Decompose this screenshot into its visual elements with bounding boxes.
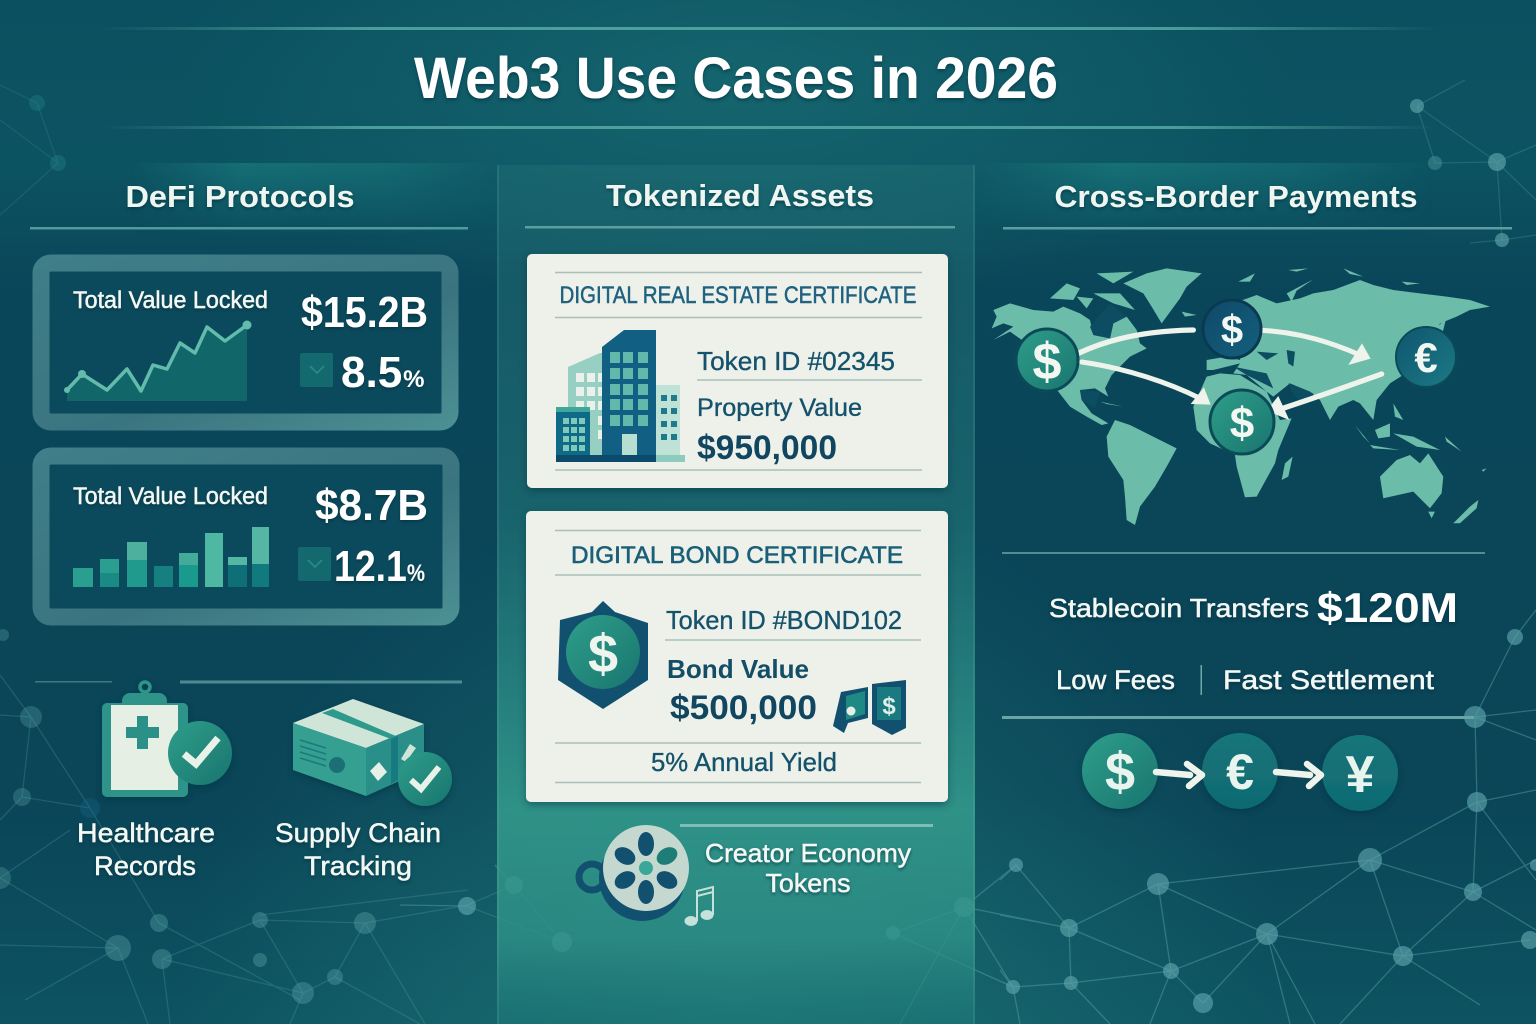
stablecoin transfers: [1049, 584, 1458, 631]
currency conversion flow: [1082, 733, 1398, 811]
card: digital bond certificate: Token ID #BOND102: [666, 605, 902, 635]
arrow: [1156, 764, 1202, 786]
panel: total value locked line chart: Total Value Locked: [73, 287, 268, 314]
panel: total value locked line chart: $15.2B: [301, 288, 428, 337]
panel: total value locked bar chart: [41, 456, 451, 617]
map coins: [1016, 300, 1456, 454]
label: Supply Chain Tracking: Supply Chain: [275, 818, 441, 848]
coin: dollar lower: [1210, 390, 1274, 454]
icon: check badge: [300, 353, 333, 387]
title: [100, 46, 1440, 129]
label: Healthcare Records: Records: [94, 851, 196, 881]
panel: total value locked bar chart: 12.1%: [334, 542, 425, 591]
heading: Cross-Border Payments: Cross-Border Payments: [1054, 179, 1418, 214]
stablecoin transfers: $120M: [1317, 584, 1458, 631]
heading: Tokenized Assets: Tokenized Assets: [606, 178, 874, 213]
coin: dollar: $: [1105, 742, 1135, 802]
bar chart: [73, 527, 269, 587]
column: Cross-Border Payments: [992, 179, 1512, 811]
creator economy tokens: [579, 824, 933, 926]
coin: dollar: $: [1033, 333, 1062, 391]
column: DeFi Protocols: [30, 179, 468, 881]
panel: total value locked line chart: [41, 263, 450, 422]
title: Web3 Use Cases in 2026: [414, 46, 1058, 111]
icon: token notes: $: [882, 693, 896, 720]
coin: dollar: [1016, 329, 1078, 391]
coin: dollar navy: [1203, 300, 1261, 358]
coin: yen: ¥: [1346, 746, 1375, 804]
creator economy tokens: Tokens: [766, 868, 850, 898]
heading: DeFi Protocols: DeFi Protocols: [126, 179, 354, 214]
panel: total value locked bar chart: $8.7B: [315, 481, 428, 530]
coin: euro: €: [1226, 744, 1254, 800]
line chart: [64, 320, 252, 401]
column: Tokenized Assets: [525, 178, 1512, 926]
feature labels: Low Fees: [1056, 665, 1175, 695]
card: digital real estate certificate: $950,000: [697, 429, 837, 467]
panel: total value locked bar chart: Total Value Locked: [73, 483, 268, 510]
card: digital bond certificate: DIGITAL BOND CERTIFICATE: [571, 542, 903, 569]
card: digital real estate certificate: Token ID #02345: [697, 346, 895, 376]
card: digital bond certificate: Bond Value: [667, 654, 809, 684]
creator economy tokens: Creator Economy: [705, 838, 911, 868]
card: digital bond certificate: $500,000: [670, 689, 817, 727]
transfer arrows: [1078, 330, 1382, 420]
icon: token notes: [833, 680, 906, 735]
icon: shield with dollar: $: [588, 624, 618, 684]
card: digital real estate certificate: DIGITAL REAL ESTATE CERTIFICATE: [560, 282, 916, 309]
icon: supply chain box: [293, 699, 452, 806]
feature labels: Fast Settlement: [1223, 665, 1435, 695]
label: Supply Chain Tracking: [275, 818, 441, 881]
card: digital real estate certificate: Property Value: [697, 394, 862, 422]
label: Healthcare Records: [77, 818, 215, 881]
icon: buildings: [556, 330, 685, 462]
coin: yen: [1322, 735, 1398, 811]
arrow: [1276, 764, 1321, 786]
icon: film reel with music note: [579, 825, 714, 926]
icon: shield with dollar: [558, 601, 648, 709]
label: Supply Chain Tracking: Tracking: [304, 851, 412, 881]
stablecoin transfers: Stablecoin Transfers: [1049, 593, 1309, 623]
coin: euro: €: [1414, 334, 1438, 381]
coin: dollar: [1082, 733, 1158, 809]
icon: healthcare clipboard: [102, 682, 232, 797]
coin: dollar navy: $: [1221, 308, 1243, 352]
world map: [992, 268, 1490, 525]
center column band: [497, 165, 975, 1024]
icon: check badge: [298, 547, 331, 581]
card: digital bond certificate: [526, 511, 948, 802]
feature labels: [1056, 665, 1435, 695]
coin: dollar lower: $: [1230, 399, 1254, 448]
coin: euro: [1396, 327, 1456, 387]
card: digital bond certificate: 5% Annual Yield: [651, 747, 837, 777]
coin: euro: [1202, 733, 1278, 809]
label: Healthcare Records: Healthcare: [77, 818, 215, 848]
card: digital real estate certificate: [527, 254, 948, 488]
panel: total value locked line chart: 8.5%: [341, 348, 425, 397]
